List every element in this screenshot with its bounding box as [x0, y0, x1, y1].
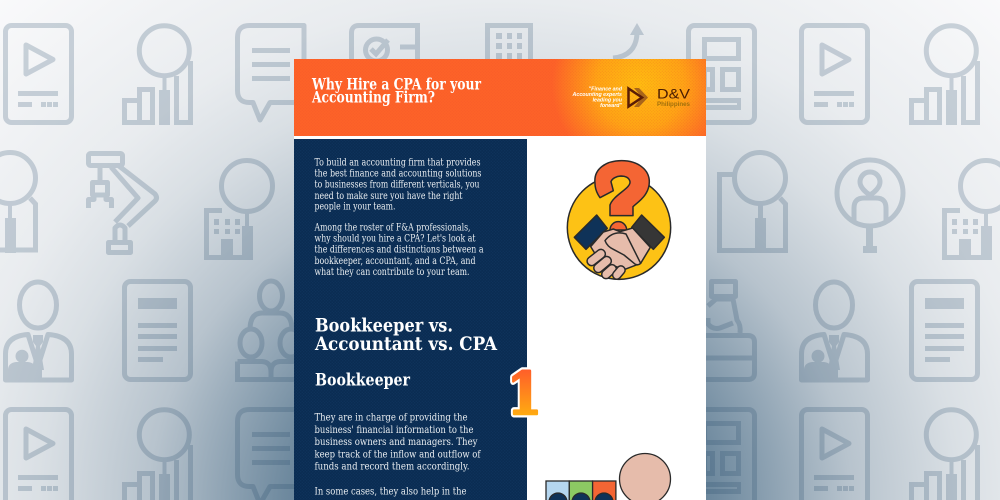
- tagline: forward": [600, 103, 622, 109]
- icon: magnified building right edge: [944, 160, 1000, 260]
- bookkeeper paragraph one: business owners and managers. They: [314, 437, 478, 448]
- section heading: Bookkeeper vs.: [315, 316, 453, 336]
- page panel: [294, 59, 706, 500]
- subheading: Bookkeeper: Bookkeeper: [315, 370, 410, 390]
- title: [311, 74, 481, 106]
- icon: magnifier chart top: [124, 26, 190, 125]
- orange cuff dome: [610, 222, 627, 230]
- icon: magnified document right: [720, 152, 786, 253]
- icon: form document bottom: [688, 410, 754, 500]
- icon: checklist card: [352, 26, 418, 62]
- icon: speech bubble bottom: [238, 410, 304, 500]
- icon: document row three: [124, 282, 190, 380]
- icon: speech bubble top: [238, 26, 304, 120]
- bookkeeper paragraph one: They are in charge of providing the: [314, 412, 468, 424]
- navy text panel: [294, 139, 527, 500]
- tagline: Accounting experts: [572, 92, 622, 98]
- bookkeeper paragraph one: keep track of the inflow and outflow of: [314, 449, 482, 460]
- icon: receptionist: [700, 282, 754, 380]
- icon: magnifier chart bottom right: [912, 410, 978, 500]
- illustration: bookkeeper at bottom: [546, 454, 670, 500]
- bookkeeper paragraph two: In some cases, they also help in the: [314, 486, 467, 498]
- intro paragraph one: To build an accounting firm that provides: [314, 158, 480, 168]
- intro paragraph two: [314, 223, 484, 278]
- intro paragraph two: what they can contribute to your team.: [314, 267, 470, 278]
- intro paragraph one: need to make sure you have the right: [314, 191, 462, 202]
- dark sleeve: [632, 215, 664, 249]
- icon: robot arm: [88, 154, 156, 252]
- logo: D&V Philippines: D&V: [657, 86, 690, 102]
- number 1: 1: [507, 360, 542, 428]
- tagline: leading you: [593, 98, 623, 104]
- tagline: [572, 86, 623, 109]
- bookkeeper paragraph one: business' financial information to the: [314, 425, 474, 436]
- icon: group of people: [238, 281, 302, 380]
- intro paragraph two: the differences and distinctions between a: [314, 245, 484, 256]
- icon: magnified building: [206, 160, 272, 260]
- colored binders: [546, 481, 616, 500]
- tagline: "Finance and: [589, 86, 623, 92]
- icon: magnifier chart top right: [912, 26, 978, 125]
- logo: D&V Philippines: Philippines: [657, 101, 690, 108]
- illustration: handshake with question mark: [567, 161, 671, 281]
- title: Accounting Firm?: [311, 88, 435, 106]
- icon: person in magnifier: [837, 160, 903, 253]
- intro paragraph one: to businesses from different verticals, you: [314, 180, 480, 190]
- icon: building: [488, 26, 530, 62]
- icon: play document top left: [6, 26, 72, 122]
- icon: play document bottom left: [6, 410, 72, 500]
- logo: D&V Philippines: [628, 86, 690, 108]
- intro paragraph two: why should you hire a CPA? Let's look at: [314, 234, 476, 245]
- icon: businessman left: [6, 282, 72, 382]
- question mark: [595, 161, 649, 216]
- icon: growth arrow: [613, 23, 644, 58]
- header banner: [294, 59, 706, 136]
- icon: document right: [912, 282, 978, 380]
- bookkeeper paragraph one: [314, 412, 482, 472]
- intro paragraph one: people in your team.: [314, 202, 396, 212]
- handshake: [585, 228, 650, 281]
- intro paragraph two: Among the roster of F&A professionals,: [314, 223, 470, 234]
- number 1: 1: [507, 360, 542, 428]
- bookkeeper paragraph one: funds and record them accordingly.: [314, 462, 470, 472]
- icon: play document top right: [802, 26, 868, 122]
- intro paragraph two: bookkeeper, accountant, and a CPA, and: [314, 256, 476, 267]
- head: [620, 454, 670, 500]
- intro paragraph one: the best finance and accounting solutions: [314, 168, 482, 180]
- yellow circle: [567, 176, 671, 279]
- icon: play document bottom right: [802, 410, 868, 500]
- icon: form document top right: [688, 26, 754, 122]
- section heading: [314, 316, 498, 355]
- title: Why Hire a CPA for your: [311, 74, 481, 94]
- icon: magnified document left edge: [0, 152, 36, 253]
- section heading: Accountant vs. CPA: [314, 334, 498, 355]
- icon: businessman right: [802, 282, 868, 382]
- icon: magnifier chart bottom: [124, 410, 190, 500]
- navy sleeve: [574, 215, 607, 249]
- intro paragraph one: [314, 158, 482, 212]
